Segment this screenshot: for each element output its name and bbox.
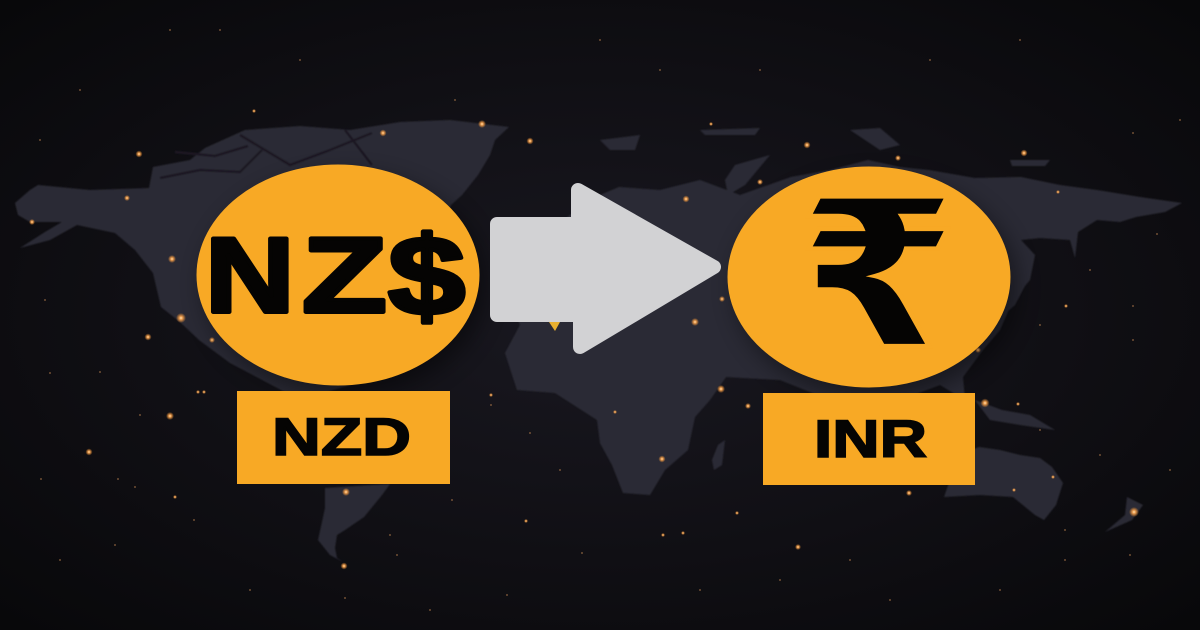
australia [944, 447, 1063, 520]
south america [318, 484, 390, 562]
eurasia and africa [505, 160, 1182, 495]
arrow [497, 190, 714, 347]
world map [15, 120, 1182, 562]
label: NZD [237, 391, 450, 484]
new zealand [1105, 497, 1143, 532]
label: INR [763, 393, 975, 485]
NZD coin [196, 164, 480, 386]
coin symbol: NZ$ [205, 213, 465, 338]
yellow marker behind arrow [549, 322, 560, 331]
indonesia [975, 400, 1055, 430]
shadow: coins [204, 175, 1017, 397]
coin symbol: rupee: ₹ [797, 156, 959, 395]
label: INR: INR [814, 410, 927, 469]
night city lights [29, 109, 1139, 570]
japan [1000, 240, 1030, 318]
label: NZD: NZD [272, 408, 411, 467]
arctic islands [600, 128, 1050, 195]
INR coin [728, 156, 1010, 395]
coin symbol: NZ$: N [205, 215, 295, 335]
coin symbol: NZ$: Z [302, 216, 387, 335]
coin symbol: NZ$: $ [388, 213, 465, 338]
madagascar [712, 440, 725, 470]
north america [15, 120, 509, 400]
